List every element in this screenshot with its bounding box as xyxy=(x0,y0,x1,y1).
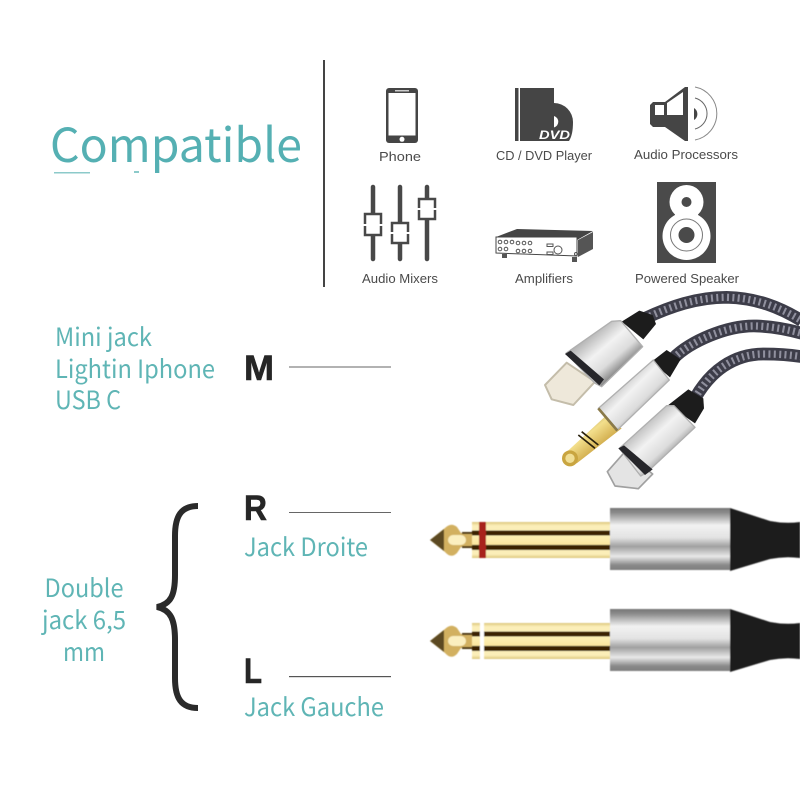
cable: mini jack xyxy=(673,326,800,358)
label: Amplifiers: Amplifiers xyxy=(515,271,573,286)
icon: DVD: DVD xyxy=(539,130,570,142)
red ring xyxy=(479,522,486,558)
tip xyxy=(430,525,472,556)
text: double jack xyxy=(40,569,126,669)
photo: left 6.35mm jack xyxy=(430,609,800,672)
black boot xyxy=(730,609,800,672)
brace xyxy=(157,506,198,708)
label: CD / DVD Player: CD / DVD Player xyxy=(496,148,593,163)
text: Jack Gauche: Jack Gauche xyxy=(244,688,384,724)
label L: L xyxy=(244,652,262,691)
black boot xyxy=(730,508,800,571)
cable: USB C xyxy=(695,354,800,398)
label: Audio Mixers: Audio Mixers xyxy=(362,271,439,286)
label: Phone: Phone xyxy=(379,149,421,164)
divider line xyxy=(323,60,325,287)
shaft xyxy=(472,623,610,659)
text: double jack: mm xyxy=(63,633,105,669)
white ring xyxy=(480,623,484,659)
faded subtitle remnant xyxy=(54,171,139,174)
label M: M xyxy=(244,349,274,388)
icon: audio mixers xyxy=(365,187,435,259)
sleeve xyxy=(610,609,730,671)
shaft xyxy=(472,522,610,558)
text: connector list xyxy=(55,318,215,417)
label: Audio Processors: Audio Processors xyxy=(634,147,738,162)
text: connector list: USB C xyxy=(55,381,121,417)
mini jack plug xyxy=(562,350,681,466)
text: double jack: Double xyxy=(44,569,124,605)
label R: R xyxy=(244,489,267,528)
icon: audio processor xyxy=(650,87,717,141)
pointer line M xyxy=(289,366,391,368)
icon: powered speaker xyxy=(657,182,716,263)
text: connector list: Mini jack xyxy=(55,318,152,354)
tip xyxy=(430,626,472,657)
text: Jack Droite: Jack Droite xyxy=(244,528,368,564)
pointer line L xyxy=(289,676,391,677)
title: Compatible xyxy=(50,107,302,176)
cable: lightning xyxy=(645,297,800,321)
device icons grid xyxy=(362,87,740,286)
text: double jack: jack 6,5 xyxy=(40,601,126,637)
pointer line R xyxy=(289,512,391,513)
USB C plug xyxy=(607,389,704,489)
photo: mini jack, lightning and USB C connectors xyxy=(545,297,800,489)
lightning plug xyxy=(545,311,656,405)
icon: phone xyxy=(386,88,418,143)
icon: DVD xyxy=(515,88,573,142)
label: Powered Speaker: Powered Speaker xyxy=(635,271,740,286)
icon: amplifier xyxy=(496,229,593,262)
photo: right 6.35mm jack xyxy=(430,508,800,571)
text: connector list: Lightin Iphone xyxy=(55,350,215,386)
sleeve xyxy=(610,508,730,570)
